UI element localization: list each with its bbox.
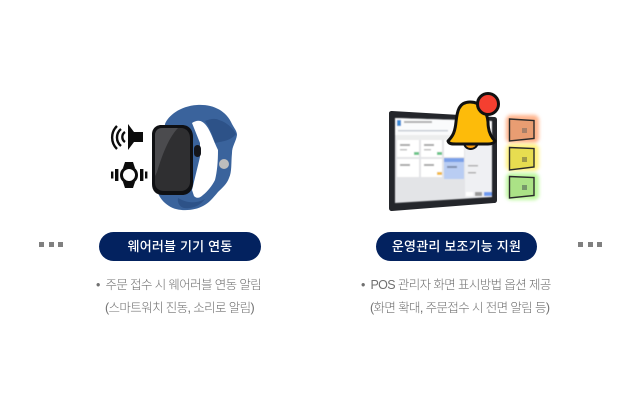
text block: wearable description (96, 278, 261, 315)
watch crown (194, 145, 201, 157)
red alert dot (478, 94, 498, 114)
text block: operations description (361, 278, 551, 315)
right ellipsis dots (578, 242, 602, 247)
icon: watch vibration (111, 162, 147, 188)
tablet body (389, 111, 497, 211)
watch button (219, 159, 229, 169)
left ellipsis dots (39, 242, 63, 247)
text block: operations description: (화면 확대, 주문접수 시 전면 알림 등) (370, 301, 549, 315)
heading pill: wearable (99, 232, 261, 261)
text block: operations description: • POS 관리자 화면 표시방법 옵션 제공 (361, 278, 551, 292)
heading pill: operations: 운영관리 보조기능 지원 (392, 239, 521, 254)
watch screen (155, 128, 190, 191)
text block: wearable description: (스마트워치 진동, 소리로 알림) (105, 301, 254, 315)
text block: wearable description: • 주문 접수 시 웨어러블 연동 알림 (96, 278, 261, 292)
watch case (152, 125, 193, 195)
icon: notification bell (448, 94, 498, 149)
tablet screen (395, 118, 492, 203)
status screen: red (506, 115, 539, 143)
status screen: yellow (506, 144, 539, 171)
heading pill: operations (376, 232, 537, 261)
heading pill: wearable: 웨어러블 기기 연동 (128, 239, 232, 254)
watch band (158, 105, 237, 210)
icon: speaker with sound waves (112, 124, 143, 150)
status screen: green (506, 173, 539, 200)
